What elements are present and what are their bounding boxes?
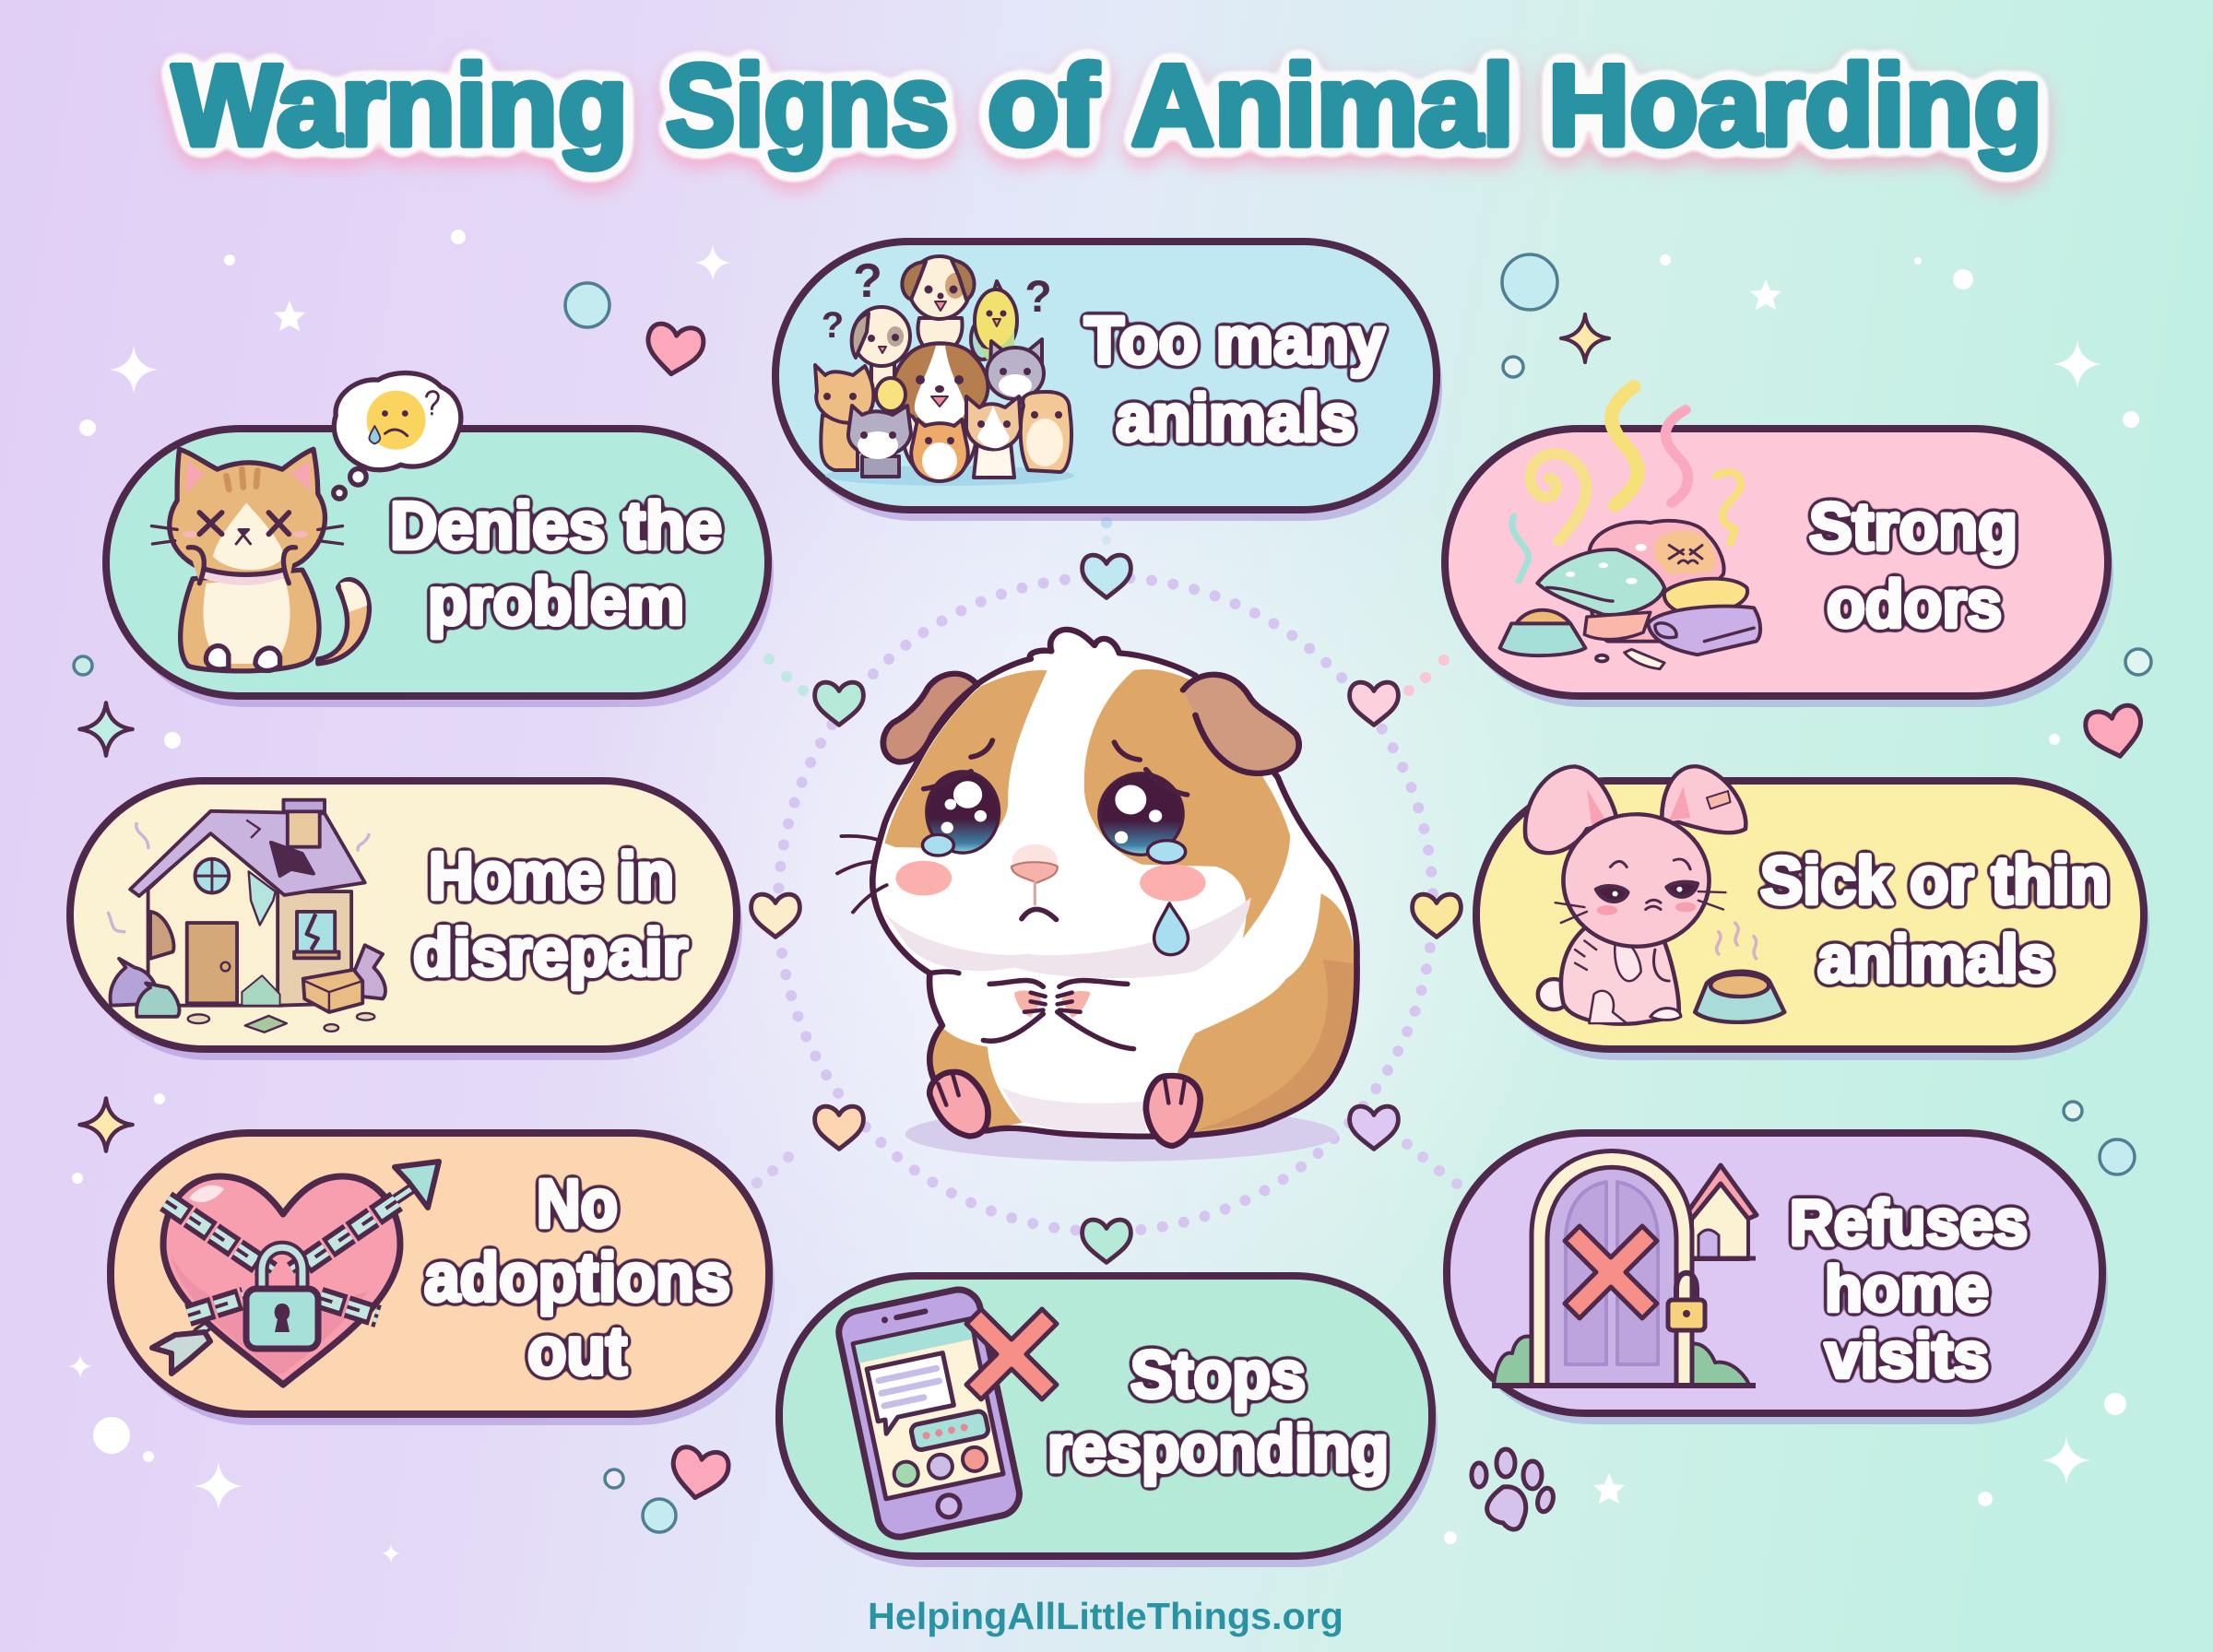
arrow	[152, 1162, 439, 1374]
label: refuses home visits: home	[1825, 1253, 1989, 1325]
icon: sick rabbit with bowl	[1525, 766, 1784, 1024]
label: denies the problem: problem	[428, 565, 684, 639]
illustration: crying guinea pig	[837, 630, 1357, 1162]
shading under head	[884, 898, 1251, 978]
label: stops responding: Stops	[1130, 1339, 1306, 1412]
icon: locked door with X	[1492, 1150, 1757, 1386]
parrot	[971, 281, 1017, 360]
icon: pile of animals	[815, 254, 1074, 486]
label: home in disrepair: disrepair	[413, 916, 688, 990]
panel: sick or thin animals	[1476, 766, 2149, 1060]
label: sick or thin animals: animals	[1817, 923, 2053, 997]
darker fur shading	[1195, 960, 1355, 1130]
nose and mouth	[1012, 844, 1058, 920]
hamster right	[1021, 392, 1071, 472]
label: no adoptions out: adoptions	[424, 1239, 730, 1316]
ground shadow	[905, 1107, 1337, 1162]
tan cat	[966, 396, 1021, 478]
arch and door	[1532, 1150, 1692, 1386]
body outline	[872, 630, 1357, 1137]
ring hearts	[751, 555, 1461, 1262]
question marks: ?	[853, 254, 882, 308]
icon: paw print	[1472, 1449, 1556, 1529]
label: too many animals	[1084, 304, 1385, 455]
connector dots	[751, 517, 1462, 1189]
label: denies the problem: Denies the	[390, 490, 722, 563]
decorative sparkles and dots	[68, 230, 2139, 1563]
decorative bubbles	[74, 254, 2151, 1532]
label: no adoptions out: out	[527, 1313, 627, 1389]
label: no adoptions out: No	[537, 1165, 618, 1242]
label: home in disrepair: Home in	[429, 840, 674, 914]
icon: chained heart with lock	[152, 1162, 439, 1385]
panel: strong odors	[1445, 386, 2113, 707]
top dog	[902, 256, 974, 352]
label: strong odors: odors	[1827, 568, 2002, 642]
left dog	[852, 307, 910, 396]
blush	[895, 861, 952, 895]
ears	[883, 674, 977, 762]
fur patches	[884, 669, 1355, 1132]
chick	[876, 378, 905, 411]
label: refuses home visits: Refuses	[1790, 1186, 2028, 1258]
label: sick or thin animals	[1760, 844, 2109, 997]
chest and arm lines	[929, 972, 1133, 1049]
panel: too many animals	[775, 242, 1442, 521]
odor swirls	[1512, 386, 1741, 581]
label: too many animals: Too many	[1084, 304, 1385, 378]
label: home in disrepair	[413, 840, 688, 990]
panel: no adoptions out	[111, 1133, 775, 1425]
label: sick or thin animals: Sick or thin	[1760, 844, 2109, 918]
outlined sparkles	[79, 314, 1609, 1151]
title: of	[988, 42, 1099, 170]
chains	[166, 1201, 396, 1316]
label: no adoptions out	[424, 1165, 730, 1389]
hands	[1014, 990, 1091, 1018]
label: refuses home visits: visits	[1825, 1319, 1989, 1391]
panel: denies the problem	[106, 373, 774, 707]
label: strong odors: Strong	[1809, 490, 2018, 564]
label: strong odors	[1809, 490, 2018, 642]
panel: home in disrepair	[70, 781, 742, 1060]
gray cat	[987, 339, 1044, 399]
whiskers	[837, 836, 887, 913]
tears	[922, 834, 1188, 955]
title: Warning	[172, 42, 628, 170]
icon: smelly blanket pile	[1500, 386, 1760, 669]
orange cat	[815, 365, 873, 470]
question marks	[822, 254, 1052, 346]
orange hamster	[911, 419, 968, 481]
padlock	[246, 1247, 318, 1349]
label: stops responding: responding	[1047, 1412, 1389, 1486]
panel: stops responding	[779, 1276, 1438, 1567]
footer: website: HelpingAllLittleThings.org	[868, 1595, 1343, 1637]
question marks: ?	[822, 305, 844, 346]
big dog	[893, 343, 988, 479]
label: too many animals: animals	[1116, 382, 1355, 455]
body fill	[872, 630, 1357, 1137]
title: Signs	[666, 42, 949, 170]
question marks: ?	[1024, 273, 1052, 322]
label: denies the problem	[390, 490, 722, 639]
title: Hoarding	[1548, 42, 2042, 170]
title: Animal	[1131, 42, 1514, 170]
bushes	[1494, 1337, 1538, 1386]
small house	[1686, 1165, 1757, 1259]
icon: worried cat with thought bubble	[151, 373, 461, 671]
small gray cat	[848, 406, 911, 477]
feet	[929, 1072, 988, 1136]
dotted ring around the guinea pig	[778, 577, 1433, 1232]
eyes	[924, 770, 1187, 855]
decorative pink hearts	[644, 323, 2148, 1503]
padlock	[1676, 1273, 1697, 1302]
eyebrows	[971, 740, 1140, 760]
panel: refuses home visits	[1447, 1133, 2108, 1424]
icon: broken house	[108, 800, 385, 1032]
red X	[1565, 1226, 1657, 1318]
label: stops responding	[1047, 1339, 1389, 1486]
icon: phone with red X	[834, 1286, 1057, 1541]
label: refuses home visits	[1790, 1186, 2028, 1391]
